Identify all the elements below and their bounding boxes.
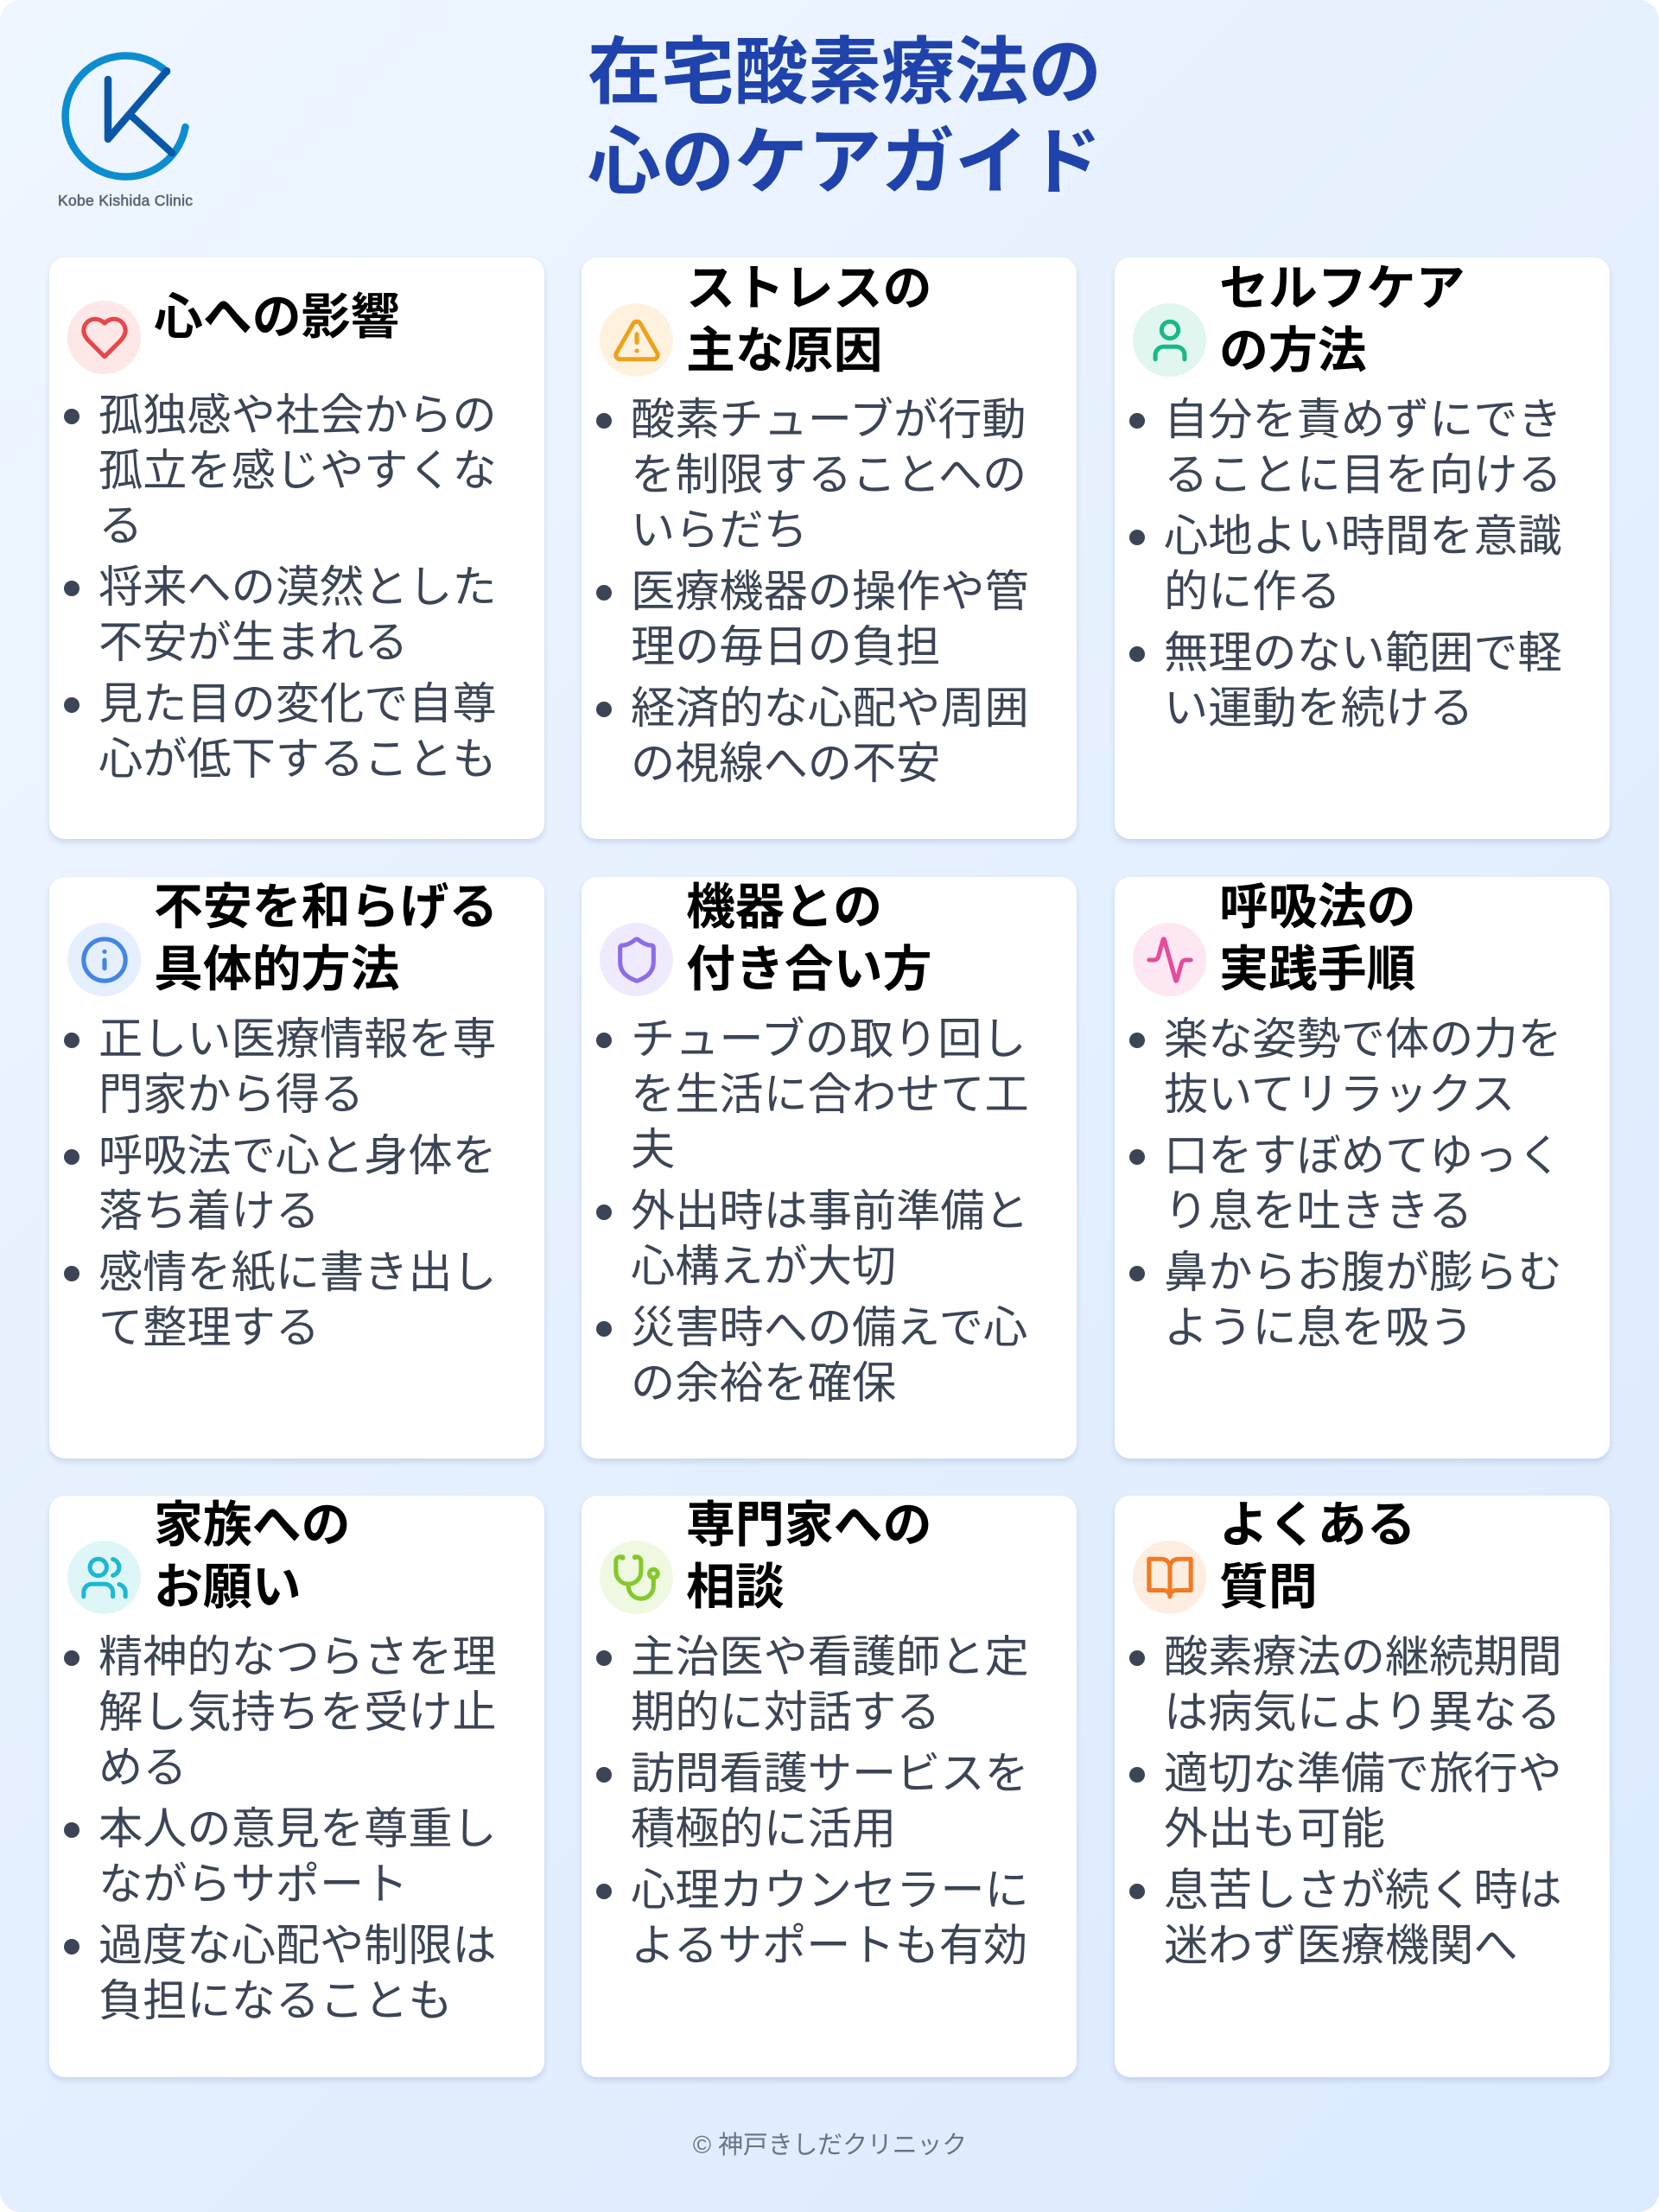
heading: 実践手順 [1219, 942, 1416, 997]
bullet list: を制限することへの [631, 450, 1027, 499]
bullet list: 解し気持ちを受け止 [99, 1688, 497, 1737]
heading: 心への影響 [154, 289, 399, 345]
heading [154, 1497, 351, 1615]
bullet list: 見た目の変化で自尊 [99, 679, 497, 728]
title: 心のケアガイド [588, 122, 1102, 204]
bullet list [596, 1014, 1029, 1408]
bullet list: 呼吸法で心と身体を [99, 1131, 497, 1180]
heading: 主な原因 [686, 323, 883, 378]
bullet list: 過度な心配や制限は [99, 1921, 497, 1970]
bullet list: 心地よい時間を意識 [1164, 512, 1562, 561]
bullet list: 心が低下することも [99, 734, 497, 784]
heading: セルフケア [1219, 261, 1465, 316]
heading: お願い [154, 1560, 302, 1615]
bullet list: 本人の意見を尊重し [99, 1804, 497, 1853]
heading: ストレスの [686, 261, 931, 316]
bullet list: る [99, 501, 143, 550]
heading: 質問 [1219, 1560, 1318, 1615]
icon: open book [1133, 1541, 1206, 1614]
bullet list: ることに目を向ける [1164, 450, 1562, 499]
bullet list: よるサポートも有効 [631, 1921, 1027, 1970]
bullet list [596, 1632, 1029, 1970]
bullet list: 理の毎日の負担 [631, 622, 940, 671]
bullet list: いらだち [631, 505, 808, 555]
bullet list: は病気により異なる [1164, 1688, 1561, 1737]
heading: 呼吸法の [1219, 880, 1416, 935]
bullet list: チューブの取り回し [631, 1014, 1027, 1064]
heading [686, 1497, 931, 1615]
bullet list: 適切な準備で旅行や [1164, 1749, 1562, 1798]
heading [1219, 261, 1465, 378]
heading [686, 261, 931, 378]
bullet list: 孤立を感じやすくな [99, 446, 497, 495]
footer: © 神戸きしだクリニック [693, 2132, 967, 2159]
bullet list: の余裕を確保 [631, 1358, 896, 1408]
bullet list: の視線への不安 [631, 739, 940, 788]
heading [1219, 1497, 1416, 1615]
bullet list: 口をすぼめてゆっく [1164, 1131, 1562, 1180]
bullet list: 積極的に活用 [631, 1804, 896, 1853]
bullet list: 心構えが大切 [631, 1242, 896, 1291]
panel: 家族へのお願い [49, 1496, 544, 2077]
bullet list: 不安が生まれる [99, 618, 408, 667]
bullet list: める [99, 1743, 187, 1792]
bullet list: 鼻からお腹が膨らむ [1164, 1248, 1562, 1297]
icon: family users [67, 1541, 141, 1614]
bullet list [64, 391, 497, 784]
bullet list [1129, 395, 1562, 733]
bullet list [596, 395, 1029, 788]
bullet list: 精神的なつらさを理 [99, 1632, 497, 1681]
bullet list: 抜いてリラックス [1164, 1070, 1515, 1119]
bullet list: 医療機器の操作や管 [631, 567, 1029, 616]
panel: よくある質問 [1115, 1496, 1610, 2077]
bullet list: 訪問看護サービスを [631, 1749, 1029, 1798]
bullet list: ながらサポート [99, 1859, 408, 1909]
bullet list: を生活に合わせて工 [631, 1070, 1029, 1119]
bullet list: 心理カウンセラーに [631, 1866, 1029, 1915]
icon: shield [600, 923, 673, 996]
icon: info [67, 923, 141, 996]
bullet list [1129, 1632, 1562, 1970]
bullet list: 酸素チューブが行動 [631, 395, 1027, 444]
bullet list: 自分を責めずにでき [1164, 395, 1562, 444]
heading [154, 880, 498, 997]
bullet list: 酸素療法の継続期間 [1164, 1632, 1562, 1681]
bullet list: 夫 [631, 1125, 675, 1174]
bullet list: 落ち着ける [99, 1186, 320, 1236]
bullet list: 門家から得る [99, 1070, 364, 1119]
heading: 家族への [154, 1497, 351, 1553]
icon: person [1133, 303, 1206, 377]
bullet list [64, 1014, 497, 1352]
bullet list [1129, 1014, 1562, 1352]
bullet list: 負担になることも [99, 1976, 453, 2025]
icon: warning triangle [600, 303, 673, 377]
heading: 機器との [686, 880, 882, 935]
bullet list: 外出も可能 [1164, 1804, 1385, 1853]
heading: 付き合い方 [686, 942, 931, 997]
bullet list: り息を吐ききる [1164, 1186, 1472, 1236]
panel: セルフケアの方法 [1115, 257, 1610, 839]
icon: stethoscope [600, 1541, 673, 1614]
bullet list: 無理のない範囲で軽 [1164, 628, 1562, 677]
logo: Kobe Kishida Clinic: Kobe Kishida Clinic [58, 192, 193, 209]
bullet list: 息苦しさが続く時は [1164, 1866, 1562, 1915]
heading: 具体的方法 [154, 942, 399, 997]
bullet list: 経済的な心配や周囲 [631, 683, 1029, 733]
bullet list: 楽な姿勢で体の力を [1164, 1014, 1562, 1064]
panel: 専門家への相談 [582, 1496, 1077, 2077]
bullet list: 的に作る [1164, 567, 1341, 616]
heading: の方法 [1219, 323, 1367, 378]
bullet list: 孤独感や社会からの [99, 391, 497, 440]
panel: 機器との付き合い方 [582, 877, 1077, 1459]
bullet list: 将来への漠然とした [99, 563, 497, 612]
panel: 心への影響 [49, 257, 544, 839]
title [588, 32, 1102, 204]
bullet list: 迷わず医療機関へ [1164, 1921, 1518, 1970]
panel: 不安を和らげる具体的方法 [49, 877, 544, 1459]
bullet list: 正しい医療情報を専 [99, 1014, 497, 1064]
panel: 呼吸法の実践手順 [1115, 877, 1610, 1459]
icon: activity pulse [1133, 923, 1206, 996]
title: 在宅酸素療法の [588, 32, 1102, 114]
bullet list: て整理する [99, 1303, 320, 1352]
heading [1219, 880, 1416, 997]
bullet list: 感情を紙に書き出し [99, 1248, 497, 1297]
bullet list: 災害時への備えで心 [631, 1303, 1027, 1352]
heading: 相談 [686, 1560, 785, 1615]
bullet list: い運動を続ける [1164, 683, 1473, 733]
heading: よくある [1219, 1497, 1416, 1553]
icon: heart [67, 301, 141, 374]
heading: 専門家への [686, 1497, 931, 1553]
bullet list: 外出時は事前準備と [631, 1186, 1029, 1236]
bullet list: ように息を吸う [1164, 1303, 1473, 1352]
bullet list [64, 1632, 497, 2025]
bullet list: 主治医や看護師と定 [631, 1632, 1029, 1681]
heading [686, 880, 931, 997]
panel: ストレスの主な原因 [582, 257, 1077, 839]
heading: 不安を和らげる [154, 880, 498, 935]
bullet list: 期的に対話する [631, 1688, 940, 1737]
logo: Kobe Kishida Clinic [58, 52, 193, 209]
